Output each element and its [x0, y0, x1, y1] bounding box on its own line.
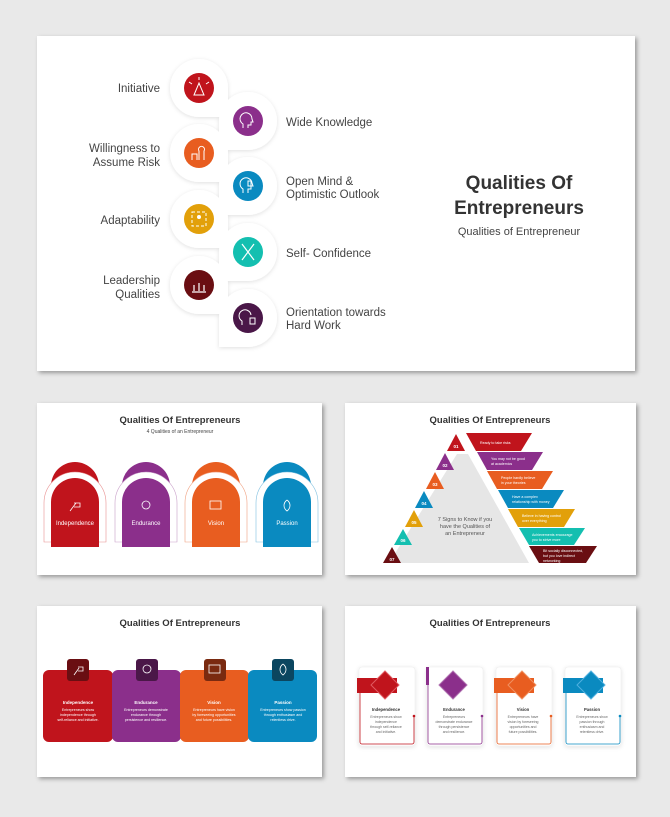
- labels: Adaptability: [101, 215, 160, 227]
- panel: slide 4 blocks: by foreseeing opportunities: [192, 713, 236, 717]
- icon: risk: [184, 138, 214, 168]
- panel: slide 3 pyramid: 07: [389, 557, 395, 562]
- panel: slide 5 cards: Entrepreneurs: [443, 715, 465, 719]
- labels: Willingness to: [89, 143, 160, 155]
- icon: self confidence: [233, 237, 263, 267]
- icon: initiative: [184, 73, 214, 103]
- panel: slide 5 cards: Passion: [584, 707, 600, 712]
- panel: slide 5 cards: through persistence: [439, 725, 469, 729]
- panel: slide 5 cards: and initiative.: [376, 730, 396, 734]
- panel: slide 5 cards: Independence: [372, 707, 401, 712]
- panel: slide 3 pyramid: but you love indirect: [543, 554, 575, 558]
- panel: slide 5 cards: Entrepreneurs show: [370, 715, 402, 719]
- panel: slide 3 pyramid: an Entrepreneur: [445, 531, 485, 537]
- panel: slide 4 blocks: Entrepreneurs have vision: [193, 708, 235, 712]
- panel: slide 4 blocks: Independence: [63, 700, 94, 705]
- panel: slide 5 cards: Vision: [517, 707, 530, 712]
- panel: slide 3 pyramid: 04: [421, 501, 427, 506]
- labels: Qualities: [115, 289, 160, 301]
- panel: slide 5 cards: demonstrate endurance: [436, 720, 473, 724]
- labels: Leadership: [103, 275, 160, 287]
- icon: leadership: [184, 270, 214, 300]
- panel: slide 5 cards: Endurance: [443, 707, 465, 712]
- panel: slide 3 pyramid: over everything: [522, 519, 547, 523]
- panel: slide 5 cards: Entrepreneurs show: [576, 715, 608, 719]
- panel: slide 2 arches: 4 Qualities of an Entrepreneur: [147, 429, 214, 435]
- panel: slide 2 arches: Independence: [56, 521, 95, 527]
- labels: Optimistic Outlook: [286, 189, 380, 201]
- panel: slide 4 blocks: through enthusiasm and: [264, 713, 302, 717]
- panel: slide 3 pyramid: Believe in having control: [522, 514, 561, 518]
- panel: slide 3 pyramid: Ready to take risks: [480, 441, 511, 445]
- panel: slide 4 blocks: Endurance: [134, 700, 158, 705]
- halos: [170, 59, 277, 347]
- icon: wide knowledge: [233, 106, 263, 136]
- icon: adaptability: [184, 204, 214, 234]
- panel: slide 3 pyramid: Bit socially disconnected,: [543, 549, 583, 553]
- title: Qualities Of: [466, 173, 573, 194]
- panel: slide 4 blocks: endurance through: [131, 713, 161, 717]
- labels: Orientation towards: [286, 307, 386, 319]
- title: Qualities of Entrepreneur: [458, 226, 580, 238]
- panel: slide 3 pyramid: you to strive more: [532, 538, 561, 542]
- panel: slide 4 blocks: Entrepreneurs show: [62, 708, 94, 712]
- labels: Open Mind &: [286, 176, 353, 188]
- panel: slide 2 arches: Qualities Of Entrepreneurs: [120, 415, 240, 426]
- panel: slide 3 pyramid: 03: [432, 482, 438, 487]
- panel: slide 2 arches: [37, 403, 322, 575]
- panel: slide 4 blocks: Vision: [207, 700, 221, 705]
- title: [454, 173, 584, 238]
- panel: slide 3 pyramid: You may not be good: [491, 457, 525, 461]
- panel: slide 4 blocks: Entrepreneurs demonstrate: [124, 708, 168, 712]
- icon: hard work: [233, 303, 263, 333]
- panel: slide 4 blocks: Qualities Of Entrepreneurs: [120, 618, 240, 629]
- labels: Wide Knowledge: [286, 117, 372, 129]
- panel: slide 5 cards: enthusiasm and: [580, 725, 604, 729]
- panel: slide 5 cards: relentless drive.: [580, 730, 604, 734]
- panel: main slide: [37, 36, 635, 371]
- panel: slide 2 arches: Endurance: [131, 521, 161, 527]
- panel: slide 3 pyramid: 01: [453, 444, 459, 449]
- labels: Assume Risk: [93, 157, 160, 169]
- panel: slide 3 pyramid: networking: [543, 559, 560, 563]
- panel: slide 3 pyramid: relationship with money: [512, 500, 550, 504]
- labels: Initiative: [118, 83, 160, 95]
- panel: slide 5 cards: vision by foreseeing: [508, 720, 539, 724]
- panel: slide 4 blocks: Entrepreneurs show passion: [260, 708, 306, 712]
- panel: slide 3 pyramid: at academics: [491, 462, 512, 466]
- panel: slide 5 cards: passion through: [580, 720, 604, 724]
- panel: slide 4 blocks: persistence and resilience.: [125, 718, 167, 722]
- panel: slide 3 pyramid: [345, 403, 636, 575]
- panel: slide 3 pyramid: 05: [411, 520, 417, 525]
- panel: slide 4 blocks: independence through: [60, 713, 96, 717]
- panel: slide 2 arches: Passion: [276, 521, 298, 527]
- title: Entrepreneurs: [454, 198, 584, 219]
- panel: slide 4 blocks: relentless drive.: [270, 718, 296, 722]
- labels: Hard Work: [286, 320, 341, 332]
- panel: slide 3 pyramid: Have a complex: [512, 495, 538, 499]
- icon: open mind: [233, 171, 263, 201]
- panel: slide 3 pyramid: have the Qualities of: [440, 524, 491, 530]
- panel: slide 3 pyramid: 7 Signs to Know if you: [438, 517, 492, 523]
- panel: slide 5 cards: future possibilities.: [509, 730, 537, 734]
- panel: slide 5 cards: [345, 606, 636, 777]
- panel: slide 5 cards: Entrepreneurs have: [508, 715, 538, 719]
- labels: Self- Confidence: [286, 248, 371, 260]
- panel: slide 3 pyramid: in your theories: [501, 481, 526, 485]
- panel: slide 5 cards: through self-reliance: [370, 725, 402, 729]
- panel: slide 4 blocks: and future possibilities.: [196, 718, 232, 722]
- panel: slide 3 pyramid: Achievements encourage: [532, 533, 573, 537]
- panel: slide 3 pyramid: 02: [442, 463, 448, 468]
- panel: slide 3 pyramid: Qualities Of Entrepreneurs: [430, 415, 550, 426]
- labels: [89, 83, 386, 332]
- panel: slide 4 blocks: [37, 606, 322, 777]
- panel: slide 4 blocks: self-reliance and initiative.: [57, 718, 99, 722]
- panel: slide 5 cards: and resilience.: [443, 730, 465, 734]
- panel: slide 4 blocks: Passion: [274, 700, 292, 705]
- panel: slide 3 pyramid: 06: [400, 538, 406, 543]
- panel: slide 5 cards: opportunities and: [510, 725, 536, 729]
- panel: slide 3 pyramid: People hardly believe: [501, 476, 535, 480]
- panel: slide 5 cards: independence: [375, 720, 397, 724]
- panel: slide 2 arches: Vision: [208, 521, 224, 527]
- panel: slide 5 cards: Qualities Of Entrepreneurs: [430, 618, 550, 629]
